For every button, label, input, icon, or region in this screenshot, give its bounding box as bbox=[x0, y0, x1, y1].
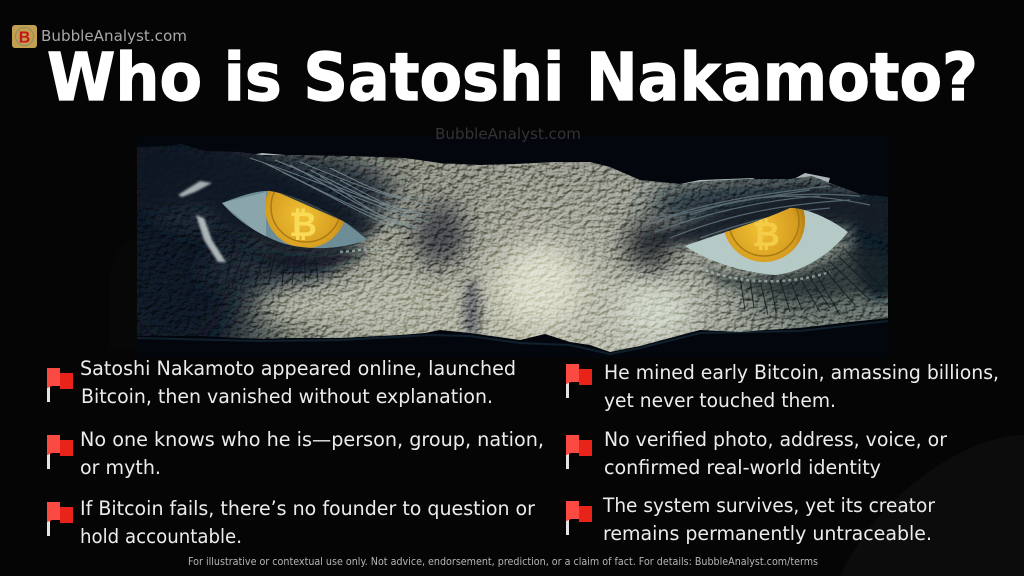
right eye bbox=[685, 208, 848, 275]
bullet: unknown identity: No one knows who he is—person, group, nation, bbox=[80, 428, 544, 451]
logo icon: B bbox=[19, 30, 30, 46]
hero image: eyes with bitcoin pupils bbox=[137, 144, 888, 355]
bullet: untouched billions: He mined early Bitcoin, amassing billions, bbox=[604, 361, 999, 384]
logo icon bbox=[12, 25, 37, 48]
bitcoin left bbox=[265, 190, 344, 248]
bullet: untraceable creator: The system survives, yet its creator bbox=[602, 494, 936, 517]
left lid highlight bbox=[178, 181, 212, 197]
bullet: no accountability: If Bitcoin fails, there’s no founder to question or bbox=[80, 497, 536, 520]
bitcoin right bbox=[724, 208, 805, 262]
bullet: no verified identity: No verified photo, address, voice, or bbox=[604, 428, 948, 451]
watermark: BubbleAnalyst.com bbox=[435, 125, 581, 143]
bullet: appeared and vanished: Bitcoin, then vanished without explanation. bbox=[81, 385, 493, 408]
bullet: unknown identity bbox=[47, 428, 544, 479]
torn highlights bbox=[245, 153, 830, 184]
right eyebrow streaks bbox=[640, 186, 870, 238]
bullet: appeared and vanished: Satoshi Nakamoto appeared online, launched bbox=[80, 357, 516, 380]
left eye bbox=[222, 190, 366, 248]
bullet: untouched billions: yet never touched them. bbox=[604, 389, 836, 412]
left eyebrow hairs bbox=[250, 158, 434, 232]
skin texture bbox=[137, 140, 888, 355]
lower lashes right bbox=[740, 250, 880, 315]
bullet: no accountability bbox=[47, 497, 536, 548]
dark lid shadows bbox=[137, 147, 380, 255]
bullet: untouched billions bbox=[566, 361, 999, 412]
title: Who is Satoshi Nakamoto? bbox=[47, 39, 978, 116]
lower lashes left bbox=[225, 240, 318, 290]
bullet: unknown identity: or myth. bbox=[80, 456, 161, 479]
bullet: no accountability: hold accountable. bbox=[80, 525, 242, 548]
bitcoin right: ₿ bbox=[752, 215, 780, 255]
bullet: no verified identity bbox=[566, 428, 948, 479]
bullet: appeared and vanished bbox=[47, 357, 516, 408]
bullet: untraceable creator: remains permanently untraceable. bbox=[603, 522, 932, 545]
bullet: untraceable creator bbox=[566, 494, 936, 545]
bullet: no verified identity: confirmed real-world identity bbox=[604, 456, 881, 479]
footer disclaimer: For illustrative or contextual use only. Not advice, endorsement, prediction, or a claim of fact. For details: BubbleAnalyst.com/terms bbox=[188, 556, 818, 568]
brand name: BubbleAnalyst.com bbox=[41, 27, 187, 45]
skin shading bbox=[188, 232, 245, 337]
bitcoin left: ₿ bbox=[289, 205, 317, 245]
